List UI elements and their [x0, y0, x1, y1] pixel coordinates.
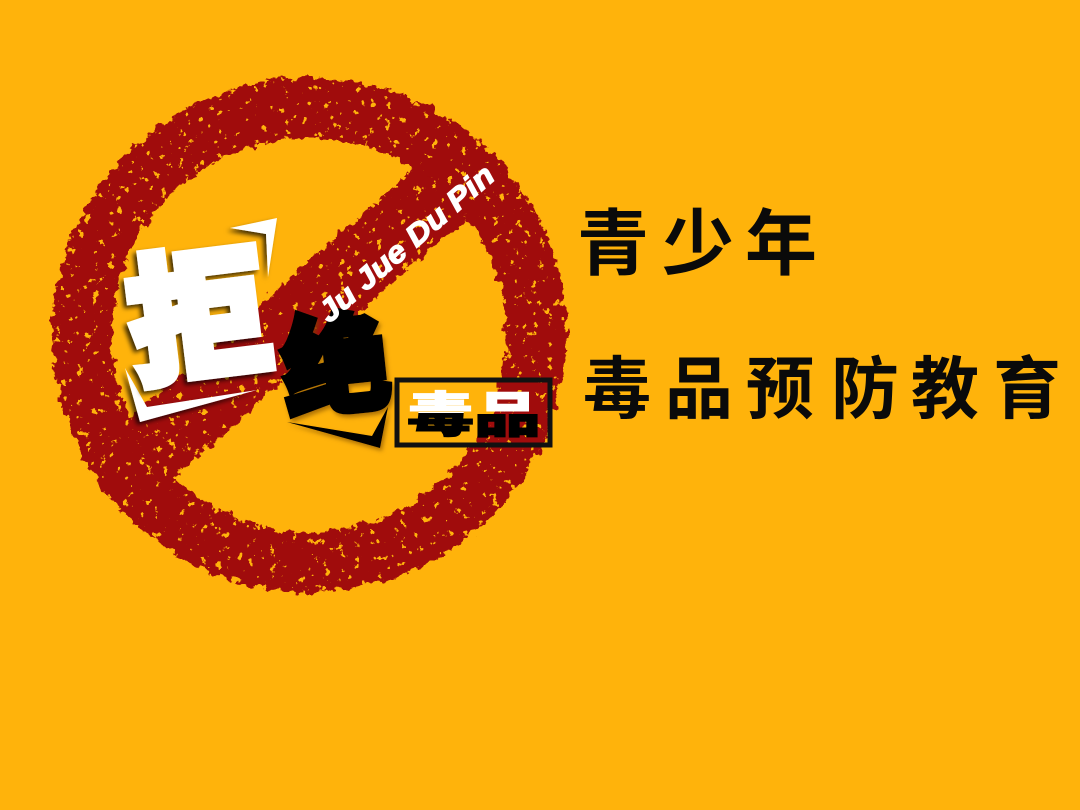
heading character: 拒: 拒: [120, 233, 278, 405]
prohibition sign: [52, 78, 566, 592]
icon: white accent wedge top: [230, 218, 277, 277]
title line 1: 青少年: [577, 205, 817, 285]
boxed label: 毒品: 毒品: [407, 389, 541, 443]
icon: white accent wedge bottom: [125, 368, 257, 422]
heading character: 绝: 绝: [277, 303, 395, 431]
title line 2: 毒品预防教育: [583, 352, 1061, 428]
icon: black accent wedge: [287, 407, 388, 448]
boxed label: 毒品: 毒品: [407, 389, 541, 443]
romanized slogan: Ju Jue Du Pin: [312, 159, 501, 329]
